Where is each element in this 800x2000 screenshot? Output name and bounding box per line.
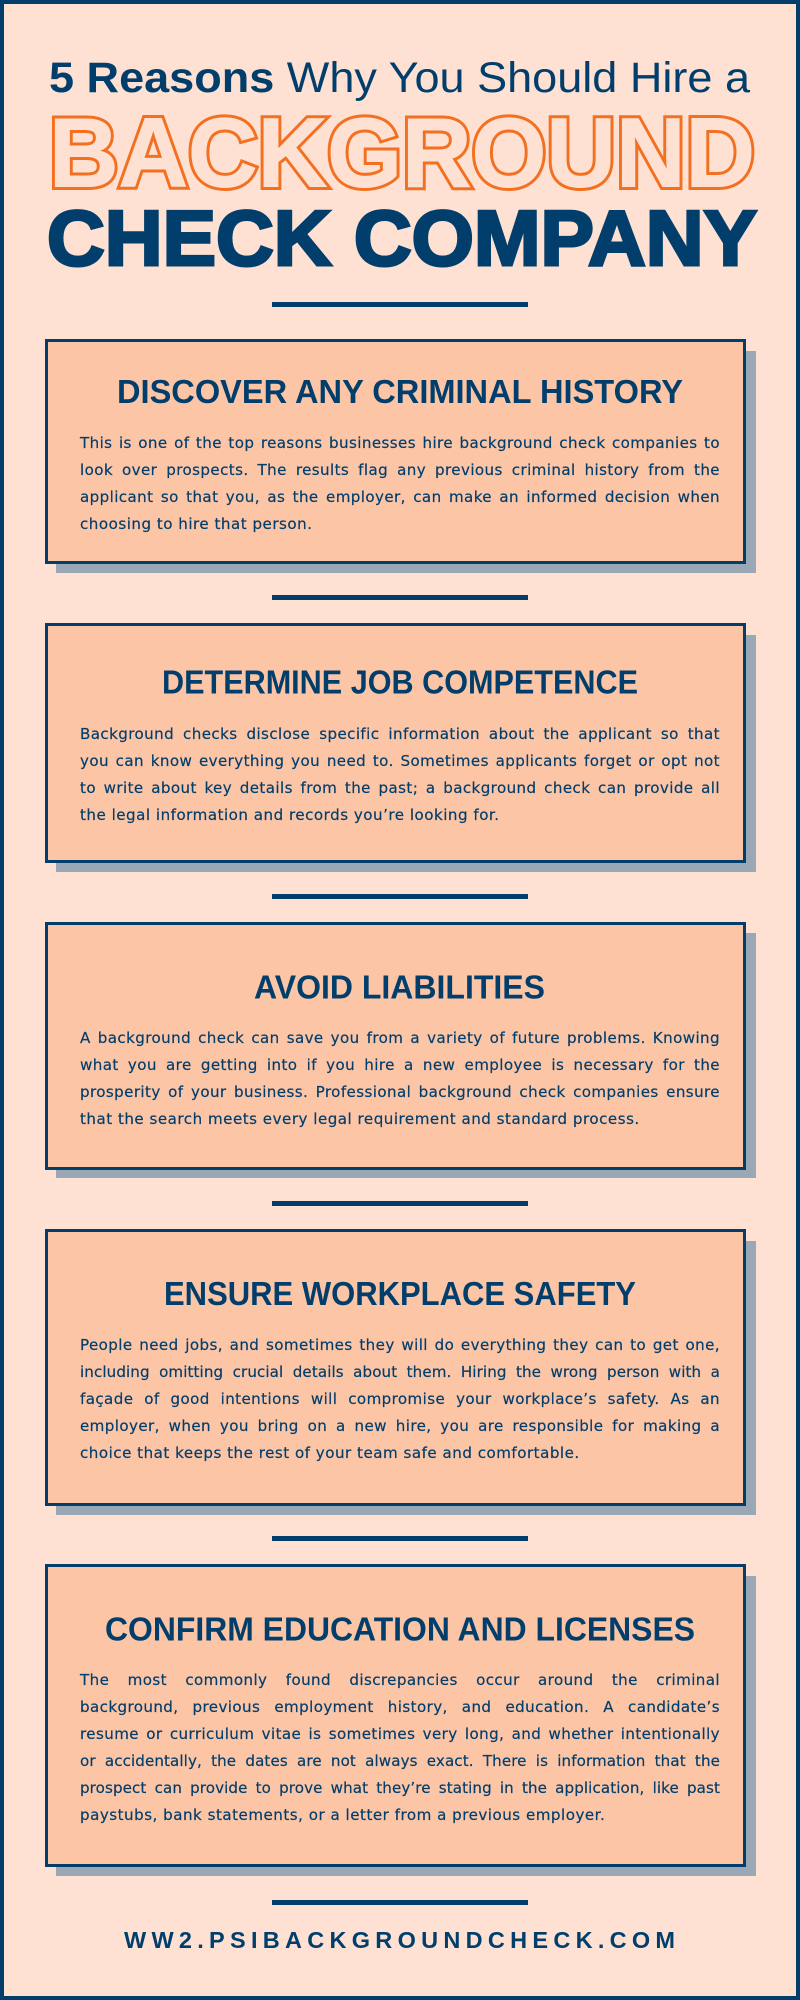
body text 5: resume or curriculum vitae is sometimes very long, and whether intentionally [80, 1725, 720, 1743]
body text 2: Background checks disclose specific information about the applicant so that [80, 725, 720, 743]
body text 2: you can know everything you need to. Sometimes applicants forget or opt not [80, 752, 720, 770]
footer website: WW2.PSIBACKGROUNDCHECK.COM [124, 1927, 675, 1953]
card shadow 3 [56, 933, 756, 1178]
body text 5: or accidentally, the dates are not always exact. There is information that the [80, 1752, 720, 1770]
body text 2 [80, 725, 720, 824]
body text 3 [80, 1029, 720, 1128]
card shadow 1 [56, 351, 756, 573]
body text 4: façade of good intentions will compromise your workplace’s safety. As an [80, 1390, 720, 1408]
body text 1: applicant so that you, as the employer, can make an informed decision when [80, 488, 720, 506]
heading 2: DETERMINE JOB COMPETENCE [162, 664, 638, 700]
body text 1: This is one of the top reasons businesses hire background check companies to [80, 434, 720, 452]
body text 3: A background check can save you from a variety of future problems. Knowing [80, 1029, 720, 1047]
body text 4: including omitting crucial details about them. Hiring the wrong person with a [80, 1363, 720, 1381]
body text 1 [80, 434, 720, 533]
card panel 3 [45, 922, 746, 1170]
body text 5: background, previous employment history, and education. A candidate’s [80, 1698, 720, 1716]
body text 1: choosing to hire that person. [80, 515, 312, 533]
card shadow 4 [56, 1241, 756, 1515]
card panel 2 [45, 623, 746, 863]
title: BACKGROUND outlined: BACKGROUND [49, 98, 755, 208]
body text 4: employer, when you bring on a new hire, you are responsible for making a [80, 1417, 720, 1435]
divider 2 [272, 894, 528, 899]
divider 1 [272, 595, 528, 600]
body text 3: prosperity of your business. Professional background check companies ensure [80, 1083, 720, 1101]
body text 3: that the search meets every legal requirement and standard process. [80, 1110, 640, 1128]
title: BACKGROUND outlined: BACKGROUND [49, 98, 755, 208]
body text 5: The most commonly found discrepancies occur around the criminal [80, 1671, 720, 1689]
body text 2: to write about key details from the past; a background check can provide all [80, 779, 720, 797]
heading 5: CONFIRM EDUCATION AND LICENSES [105, 1610, 695, 1648]
divider under title [272, 302, 528, 307]
title: CHECK COMPANY: CHECK COMPANY [47, 194, 757, 282]
body text 5: prospect can provide to prove what they’re stating in the application, like past [80, 1779, 720, 1797]
card panel 5 [45, 1564, 746, 1867]
body text 3: what you are getting into if you hire a new employee is necessary for the [80, 1056, 720, 1074]
card shadow 5 [56, 1576, 756, 1876]
body text 4: choice that keeps the rest of your team safe and comfortable. [80, 1444, 580, 1462]
heading 1: DISCOVER ANY CRIMINAL HISTORY [117, 373, 683, 410]
body text 2: the legal information and records you’re looking for. [80, 806, 500, 824]
divider 3 [272, 1201, 528, 1206]
heading 4: ENSURE WORKPLACE SAFETY [164, 1275, 636, 1312]
card panel 1 [45, 339, 746, 564]
body text 4: People need jobs, and sometimes they will do everything they can to get one, [80, 1336, 720, 1354]
card shadow 2 [56, 635, 756, 872]
body text 4 [80, 1336, 720, 1462]
card panel 4 [45, 1229, 746, 1506]
title line 1: 5 Reasons Why You Should Hire a [49, 54, 750, 102]
body text 5: paystubs, bank statements, or a letter from a previous employer. [80, 1806, 605, 1824]
heading 3: AVOID LIABILITIES [254, 968, 545, 1006]
body text 1: look over prospects. The results flag any previous criminal history from the [80, 461, 720, 479]
divider 5 [272, 1900, 528, 1905]
body text 5 [80, 1671, 720, 1824]
divider 4 [272, 1536, 528, 1541]
